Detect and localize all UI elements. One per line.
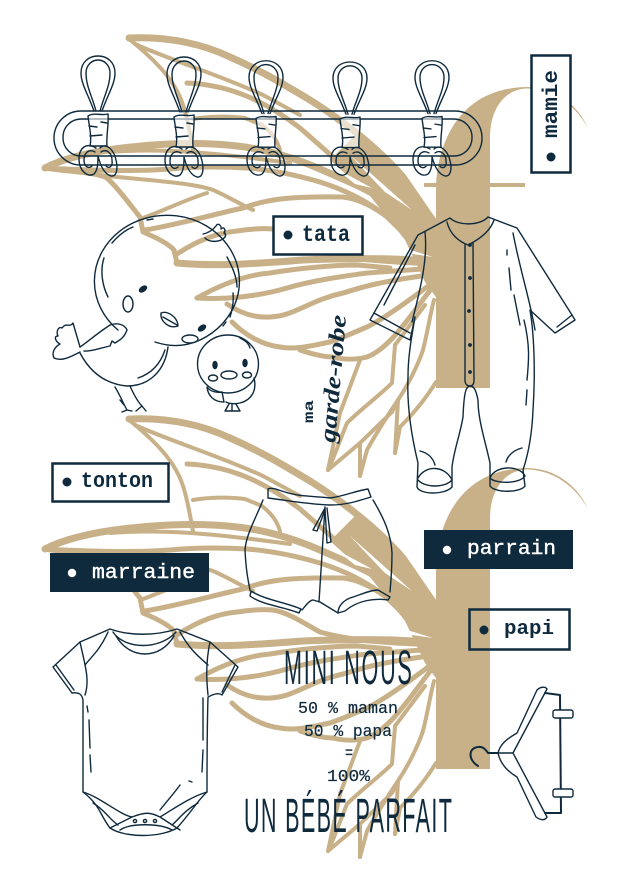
decorative wing: upper xyxy=(45,38,438,476)
illustration: coat rack xyxy=(54,56,482,177)
illustration: small chick xyxy=(198,335,258,411)
tag: papi xyxy=(470,610,570,650)
tag: tata xyxy=(274,216,362,254)
text block: 50 % maman 50 % papa = 100%: 100% xyxy=(327,767,370,786)
outline xyxy=(370,217,575,493)
decorative letter f: upper xyxy=(424,87,588,388)
text block: 50 % maman 50 % papa = 100%: 50 % papa xyxy=(304,722,392,741)
body xyxy=(245,500,392,613)
snap crotch xyxy=(83,792,207,830)
body xyxy=(80,347,168,386)
leg cuffs xyxy=(250,590,390,613)
text block: 50 % maman 50 % papa = 100% xyxy=(298,699,398,786)
tag: mamie: mamie xyxy=(541,70,564,138)
cheeks xyxy=(208,372,252,381)
collar and placket xyxy=(447,220,494,386)
wing xyxy=(80,324,127,351)
buttons xyxy=(468,244,471,373)
tag: parrain: parrain xyxy=(467,538,556,561)
cheeks xyxy=(123,296,198,343)
text block: 50 % maman 50 % papa = 100%: 50 % maman xyxy=(298,699,398,718)
arms xyxy=(498,687,547,820)
rack rail xyxy=(54,111,482,165)
tag: tonton: tonton xyxy=(81,469,153,494)
text block: 50 % maman 50 % papa = 100%: = xyxy=(345,744,353,763)
clips xyxy=(553,710,573,797)
feather tuft xyxy=(203,224,226,241)
tag: marraine: marraine xyxy=(92,562,195,585)
beak xyxy=(221,371,237,379)
bar xyxy=(545,693,561,813)
decorative wing: lower xyxy=(45,419,438,857)
vertical title: ma garde-robe: garde-robe xyxy=(315,314,351,445)
illustration: sleepsuit xyxy=(370,217,575,493)
drawstring xyxy=(313,508,331,543)
vertical title: ma garde-robe: ma xyxy=(302,399,318,423)
hooks xyxy=(79,56,451,177)
tag: papi: papi xyxy=(504,618,554,641)
illustration: big chick xyxy=(53,215,239,412)
tag: mamie xyxy=(532,56,570,172)
sleeves and seams xyxy=(374,232,572,405)
beak xyxy=(161,312,178,327)
vertical title: ma garde-robe xyxy=(302,314,351,445)
legs xyxy=(115,386,146,412)
body and feet xyxy=(207,338,255,411)
eyes xyxy=(213,360,247,368)
decorative letter f: lower xyxy=(436,468,588,769)
tag: tata: tata xyxy=(302,222,350,248)
head xyxy=(94,215,239,346)
waistband xyxy=(268,488,371,505)
tag: parrain xyxy=(424,530,573,569)
neckline xyxy=(85,632,208,665)
outline xyxy=(53,629,238,836)
feet xyxy=(418,448,525,486)
illustration: bodysuit xyxy=(53,629,238,836)
tag: marraine xyxy=(50,553,209,592)
heading: mini nous: MINI NOUS xyxy=(284,640,412,694)
illustration: hanger xyxy=(470,687,573,820)
illustration: bloomers xyxy=(245,488,392,613)
tail xyxy=(53,323,80,359)
eyes xyxy=(138,285,207,332)
seams xyxy=(56,642,235,810)
head xyxy=(198,335,258,393)
heading: un bébé parfait: UN BÉBÉ PARFAIT xyxy=(244,788,452,842)
hook xyxy=(470,747,498,766)
tag: tonton xyxy=(52,464,168,502)
